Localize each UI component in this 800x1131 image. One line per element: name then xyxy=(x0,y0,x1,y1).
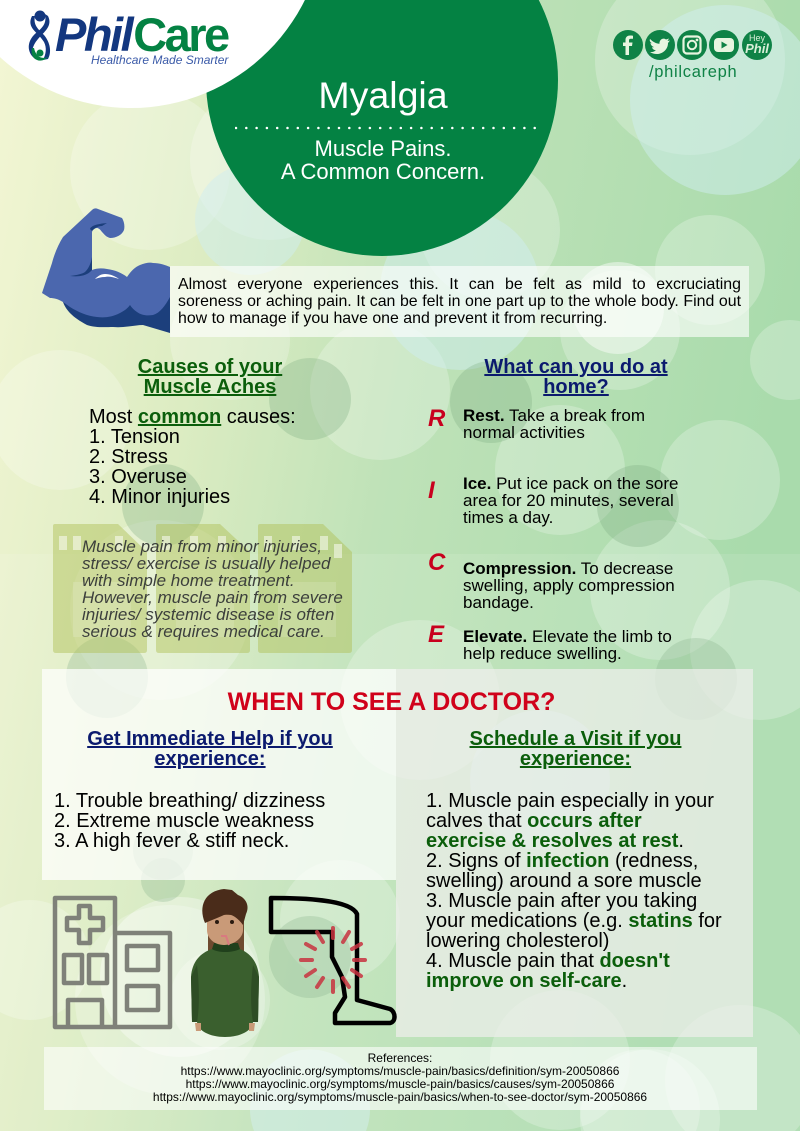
causes list: Most common causes: xyxy=(89,406,296,428)
panel: minor injuries note xyxy=(53,524,352,653)
causes heading: Muscle Aches xyxy=(144,376,276,398)
RICE: R: R xyxy=(428,405,445,432)
references text: References: xyxy=(368,1051,432,1065)
intro text: Almost everyone experiences this. It can be felt as mild to excruciating soreness or aching pain. It can be felt in one part up to the whole body. Find out how to manage if you have one and prevent it from recurring. xyxy=(178,276,741,327)
logo: PhilCare xyxy=(28,8,229,67)
schedule list: calves that occurs after xyxy=(426,810,642,832)
panel: immediate help xyxy=(42,669,396,880)
icon: flexed muscle arm xyxy=(42,208,170,333)
heading: when to see a doctor: WHEN TO SEE A DOCTOR? xyxy=(228,688,555,716)
home care heading: home? xyxy=(543,376,609,398)
panel: home care xyxy=(484,356,668,398)
icon row xyxy=(613,30,772,60)
note backdrop icons xyxy=(53,524,352,653)
RICE: I: I xyxy=(428,477,435,504)
RICE: E: E xyxy=(428,621,444,648)
immediate help heading: Get Immediate Help if you xyxy=(87,728,333,750)
schedule heading xyxy=(470,728,682,770)
social handle: /philcareph xyxy=(649,63,737,81)
note text: injuries/ systemic disease is often xyxy=(82,605,334,624)
RICE: compression text: Compression. To decrease swelling, apply compression bandage. xyxy=(463,559,675,612)
schedule list: 3. Muscle pain after you taking xyxy=(426,890,697,912)
causes list: 2. Stress xyxy=(89,446,168,468)
schedule list: exercise & resolves at rest. xyxy=(426,830,684,852)
causes heading xyxy=(138,356,282,398)
immediate help heading xyxy=(87,728,333,770)
note text: However, muscle pain from severe xyxy=(82,588,343,607)
white logo backdrop xyxy=(0,0,325,108)
schedule list xyxy=(426,790,722,992)
causes list: 4. Minor injuries xyxy=(89,486,230,508)
Hey Phil label: Phil xyxy=(745,41,769,56)
note text: serious & requires medical care. xyxy=(82,622,325,641)
title: Myalgia xyxy=(318,74,448,116)
RICE: C: C xyxy=(428,549,445,576)
panel: references xyxy=(44,1047,757,1110)
icon: leg with knee pain xyxy=(268,896,397,1026)
note text: with simple home treatment. xyxy=(82,571,295,590)
logo tagline: Healthcare Made Smarter xyxy=(91,53,228,67)
immediate help list xyxy=(54,790,325,852)
RICE: ice text: Ice. Put ice pack on the sore area for 20 minutes, several times a day. xyxy=(463,474,678,527)
immediate help list: 2. Extreme muscle weakness xyxy=(54,810,314,832)
logo wordmark: PhilCare xyxy=(55,8,228,61)
RICE: rest text: Rest. Take a break from normal activities xyxy=(463,406,645,442)
schedule list: lowering cholesterol) xyxy=(426,930,609,952)
panel: causes xyxy=(89,356,296,508)
subtitle: Muscle Pains. xyxy=(315,136,451,161)
schedule list: 2. Signs of infection (redness, xyxy=(426,850,698,872)
note text: Muscle pain from minor injuries, xyxy=(82,537,322,556)
immediate help heading: experience: xyxy=(154,748,266,770)
home care heading xyxy=(484,356,668,398)
immediate help list: 1. Trouble breathing/ dizziness xyxy=(54,790,325,812)
title dotted divider xyxy=(235,126,536,130)
references text xyxy=(153,1051,647,1104)
immediate help list: 3. A high fever & stiff neck. xyxy=(54,830,289,852)
subtitle xyxy=(281,136,485,184)
note text xyxy=(82,537,343,641)
social icons xyxy=(613,30,772,81)
schedule list: improve on self-care. xyxy=(426,970,627,992)
references text: https://www.mayoclinic.org/symptoms/muscle-pain/basics/definition/sym-20050866 xyxy=(181,1064,619,1078)
icon: logo ribbon xyxy=(28,10,50,61)
intro text panel xyxy=(170,266,749,337)
icon: hospital xyxy=(52,896,172,1030)
references text: https://www.mayoclinic.org/symptoms/muscle-pain/basics/when-to-see-doctor/sym-20050866 xyxy=(153,1090,647,1104)
home care heading: What can you do at xyxy=(484,356,668,378)
schedule list: 4. Muscle pain that doesn't xyxy=(426,950,670,972)
Hey Phil label: Hey xyxy=(749,33,765,43)
icon: sick woman with thermometer xyxy=(191,889,259,1037)
schedule heading: experience: xyxy=(520,748,631,770)
causes list: 1. Tension xyxy=(89,426,180,448)
note text: stress/ exercise is usually helped xyxy=(82,554,331,573)
panel: schedule visit xyxy=(396,669,753,1037)
references text: https://www.mayoclinic.org/symptoms/muscle-pain/basics/causes/sym-20050866 xyxy=(186,1077,614,1091)
subtitle: A Common Concern. xyxy=(281,159,485,184)
causes heading: Causes of your xyxy=(138,356,282,378)
RICE: elevate text: Elevate. Elevate the limb to help reduce swelling. xyxy=(463,627,672,663)
schedule list: your medications (e.g. statins for xyxy=(426,910,722,932)
green title circle xyxy=(206,0,558,256)
Hey Phil label xyxy=(745,33,770,56)
causes list: 3. Overuse xyxy=(89,466,187,488)
schedule heading: Schedule a Visit if you xyxy=(470,728,681,750)
schedule list: 1. Muscle pain especially in your xyxy=(426,790,714,812)
causes list xyxy=(89,406,296,508)
schedule list: swelling) around a sore muscle xyxy=(426,870,702,892)
